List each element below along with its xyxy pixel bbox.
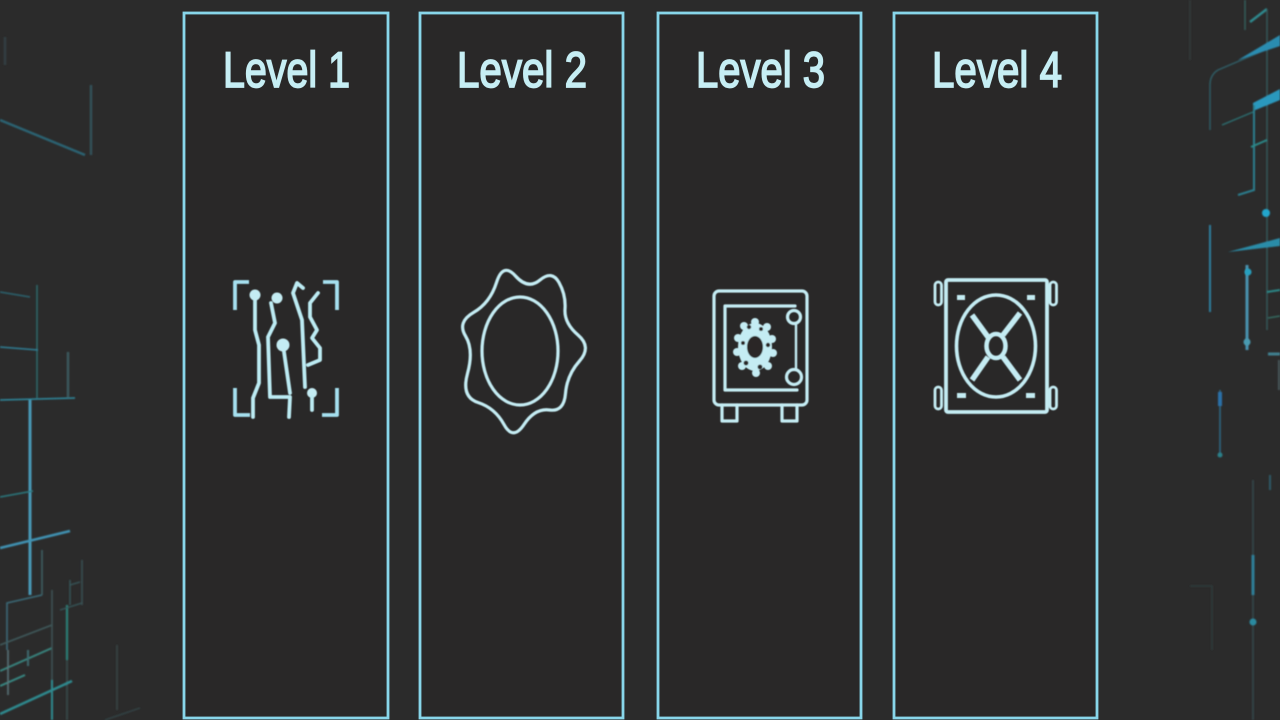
panel: level 3	[658, 13, 861, 718]
heading: level 2: Level 2	[457, 42, 587, 98]
heading: level 4: Level 4	[932, 42, 1062, 98]
panel: level 4	[894, 13, 1097, 718]
icon: vault door	[935, 280, 1056, 412]
icon: circuit traces in brackets	[235, 282, 337, 417]
virus emblem	[733, 318, 777, 377]
icon: safe with virus	[714, 291, 807, 421]
panel: level 2	[420, 13, 623, 718]
background: left circuit lines	[0, 37, 140, 720]
background: right glowing nodes	[1218, 209, 1270, 626]
heading: level 3: Level 3	[696, 42, 825, 98]
icon: wavy seal	[463, 270, 585, 433]
heading: level 1: Level 1	[223, 42, 350, 98]
panel: level 1	[184, 13, 388, 718]
background: right circuit lines	[1190, 0, 1280, 720]
